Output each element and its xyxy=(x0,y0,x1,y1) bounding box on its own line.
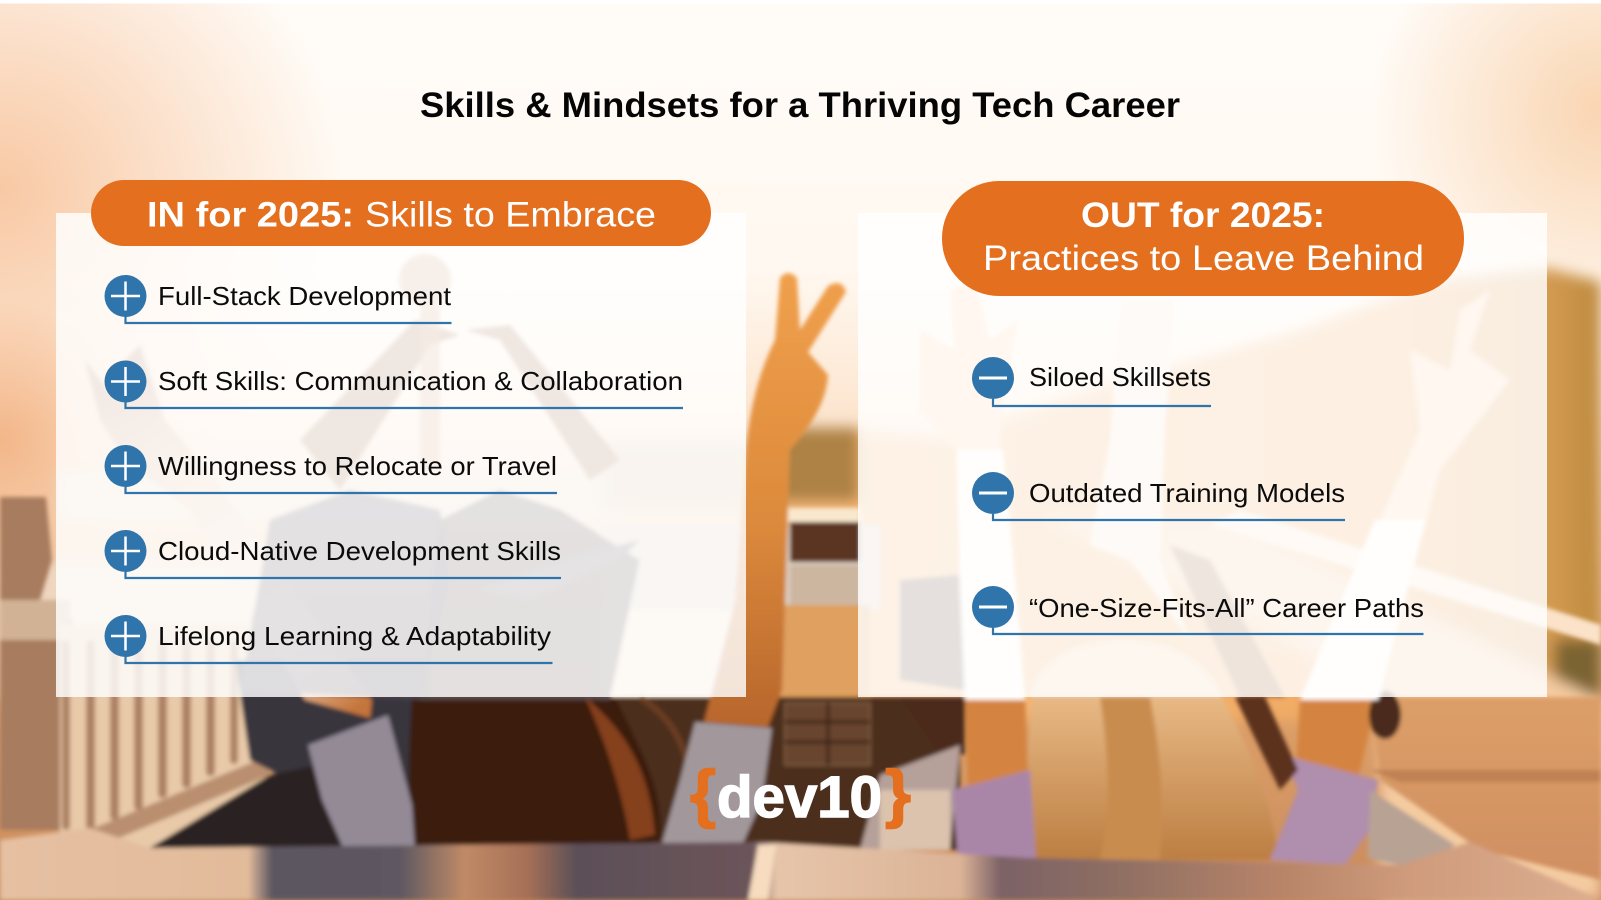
item: Willingness to Relocate: Willingness to Relocate or Travel xyxy=(158,451,557,481)
logo: dev10 xyxy=(690,757,911,830)
item: Cloud-Native: Cloud-Native Development Skills xyxy=(158,536,561,566)
purple striped sleeves xyxy=(952,770,1036,860)
panel: IN for 2025 backdrop xyxy=(56,213,746,697)
item: Outdated Training Models xyxy=(972,472,1345,520)
panel: OUT for 2025 backdrop xyxy=(858,213,1547,697)
item: Full-Stack Development: Full-Stack Development xyxy=(158,281,452,311)
heading pill: IN for 2025: IN for 2025: xyxy=(147,196,354,234)
side mirror and door xyxy=(1369,691,1401,739)
heading pill: OUT for 2025: Practices to Leave Behind xyxy=(983,239,1424,278)
item: Soft Skills xyxy=(104,360,683,408)
arms and hands rising behind the overlay panels xyxy=(85,345,372,718)
blonde arms xyxy=(965,697,1028,790)
item: Lifelong Learning xyxy=(104,615,552,663)
road xyxy=(1370,697,1601,880)
dashboard interior xyxy=(600,697,960,850)
logo: dev10: } xyxy=(885,757,911,829)
item: Full-Stack Development xyxy=(104,275,452,323)
logo: dev10: { xyxy=(690,757,716,829)
item: Cloud-Native xyxy=(104,530,561,578)
blonde woman's right arm and hand xyxy=(1300,290,1510,700)
heading pill: IN for 2025: Skills to Embrace xyxy=(365,196,656,234)
heading pill: IN for 2025 xyxy=(91,180,711,246)
item: One-Size-Fits-All xyxy=(972,586,1424,634)
driver head and shoulder xyxy=(900,697,965,755)
list: practices to leave behind xyxy=(972,357,1424,634)
heading pill: OUT for 2025: OUT for 2025: xyxy=(1081,196,1325,235)
top white strip xyxy=(0,0,1601,4)
logo: dev10: dev10 xyxy=(717,765,882,830)
item: Outdated Training Models: Outdated Training Models xyxy=(1029,478,1345,508)
heading pill: OUT for 2025 xyxy=(942,181,1464,296)
blonde woman's left arm and hand xyxy=(920,280,1025,700)
car body xyxy=(0,828,1601,900)
balustrade rail and balusters xyxy=(60,625,265,850)
grey sleeves xyxy=(308,715,415,852)
title: Skills & Mindsets for a Thriving Tech Career xyxy=(420,86,1180,125)
item: One-Size-Fits-All: “One-Size-Fits-All” Career Paths xyxy=(1029,593,1424,623)
passenger back left xyxy=(235,660,430,850)
blonde hair xyxy=(1026,697,1280,860)
item: Siloed Skillsets xyxy=(972,357,1211,406)
list: skills to embrace xyxy=(104,275,683,663)
dark hair xyxy=(409,697,661,850)
windshield band xyxy=(600,525,880,610)
item: Lifelong Learning: Lifelong Learning & Adaptability xyxy=(158,621,551,651)
item: Siloed Skillsets: Siloed Skillsets xyxy=(1029,362,1211,392)
item: Soft Skills: Soft Skills: Communication & Collaboration xyxy=(158,366,683,396)
balustrade pedestal xyxy=(0,497,72,830)
item: Willingness to Relocate xyxy=(104,445,557,493)
